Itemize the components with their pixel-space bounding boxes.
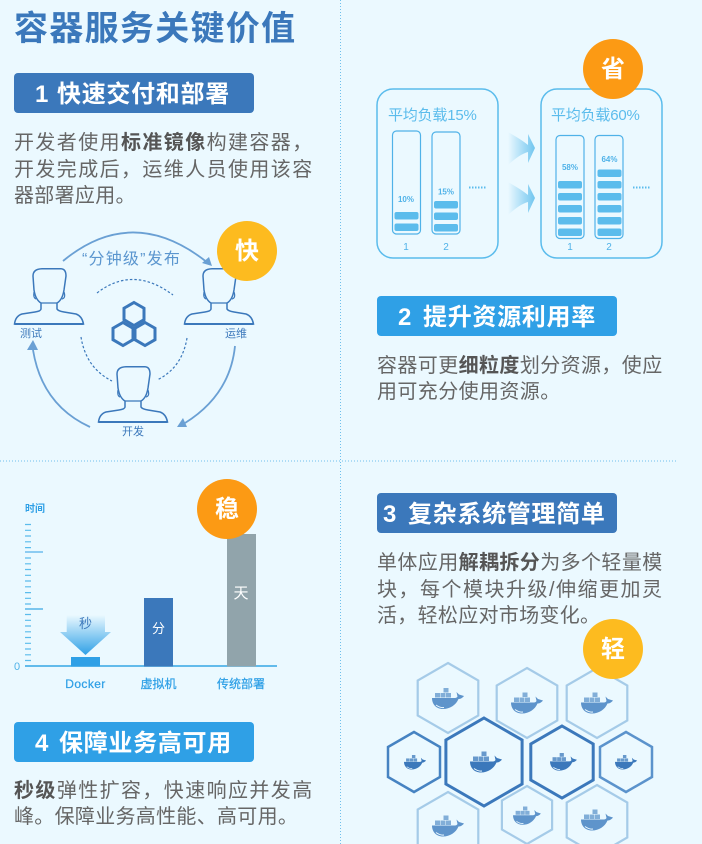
text block 2: 细粒度划分资源，使应 [459,355,663,377]
person: test: 测试 [20,327,42,340]
card: average load 15%: 2 [443,242,449,253]
text block 3: 活，轻松应对市场变化。 [377,604,600,627]
caption: minute-level release: “分钟级”发布 [82,250,181,268]
heading badge 4: 保障业务高可用 [59,730,232,757]
heading badge 3: 3 [383,501,397,528]
card: average load 60% [541,89,662,258]
arrow: dev to test [27,340,90,427]
text block 2: 容器可更 [377,354,459,377]
text block 1: 器部署应用。 [14,184,136,207]
text block 1: 开发完成后，运维人员使用该容 [14,158,314,181]
arrows: left to right [508,132,535,215]
heading badge 3 [377,493,617,533]
panel: 3 simple system management [377,493,664,844]
heading badge 4 [14,722,254,762]
card: average load 60%: 1 [567,242,573,253]
light hexagons [418,663,627,844]
panel: 4 stability chart [14,479,314,828]
text block 3: 解耦拆分为多个轻量模 [459,552,663,574]
badge: save [583,39,643,99]
heading badge 2: 提升资源利用率 [423,304,596,331]
bar chart: deployment time: 0 [14,661,20,673]
heading badge 1: 1 [35,81,49,108]
badge: light: 轻 [601,636,625,663]
axis label: time: 时间 [25,502,45,515]
card: average load 15%: 15% [438,188,454,196]
card: average load 15%: 平均负载15% [388,107,477,124]
card: average load 60%: 64% [601,155,618,164]
bar: traditional deployment [217,534,265,691]
heading badge 2: 2 [398,304,412,331]
text block 1: 开发者使用 [14,131,121,154]
card: average load 60%: 2 [606,242,612,253]
person: dev [98,367,168,438]
text block 1: 标准镜像构建容器， [121,132,314,154]
text block 4: 秒级 [14,779,57,802]
card: average load 60%: 58% [562,163,578,172]
card: average load 15%: 10% [398,195,414,204]
badge: fast [217,221,277,281]
bar: traditional deployment: 天 [233,585,249,602]
panel: 2 resource utilization chart [377,39,663,403]
bar chart: deployment time [14,502,277,691]
card: average load 60%: 平均负载60% [551,107,640,124]
icon: hexagon cluster [113,302,155,346]
panel: 1 fast delivery [14,73,314,438]
heading badge 4: 4 [35,730,49,757]
text block 4: 峰。保障业务高性能、高可用。 [14,805,298,828]
bar: Docker: 秒 [79,616,92,631]
badge: fast: 快 [235,238,259,265]
heading badge 1 [14,73,254,113]
heading badge 2 [377,296,617,336]
bar: Docker: Docker [65,677,106,691]
text block 3: 块，每个模块升级/伸缩更加灵 [377,578,664,601]
delivery cycle diagram [14,221,277,438]
badge: save: 省 [601,56,625,83]
hexagon whale grid [388,663,652,844]
bar: virtual machine: 虚拟机 [140,677,177,691]
heading badge 1: 快速交付和部署 [57,80,230,108]
text block 4: 弹性扩容，快速响应并发高 [57,779,314,802]
bar: virtual machine [140,598,177,691]
text block 2: 用可充分使用资源。 [377,380,561,403]
badge: stable [197,479,257,539]
arrow: test to ops [63,232,212,266]
text block 3: 单体应用 [377,551,459,574]
person: ops: 运维 [225,327,247,340]
bar: virtual machine: 分 [152,621,165,636]
person: test [14,269,84,340]
card: average load 15% [377,89,498,258]
card: average load 15%: 1 [403,242,409,253]
title: 容器服务关键价值 [14,10,296,48]
bar: Docker [60,615,111,691]
person: ops [184,269,254,340]
arrow: ops to dev [177,346,235,427]
badge: light [583,619,643,679]
dark hexagons [388,718,652,806]
person: dev: 开发 [122,424,144,438]
bar: traditional deployment: 传统部署 [217,676,265,691]
badge: stable: 稳 [215,496,239,523]
heading badge 3: 复杂系统管理简单 [408,501,606,528]
icons: docker whales [404,688,637,836]
